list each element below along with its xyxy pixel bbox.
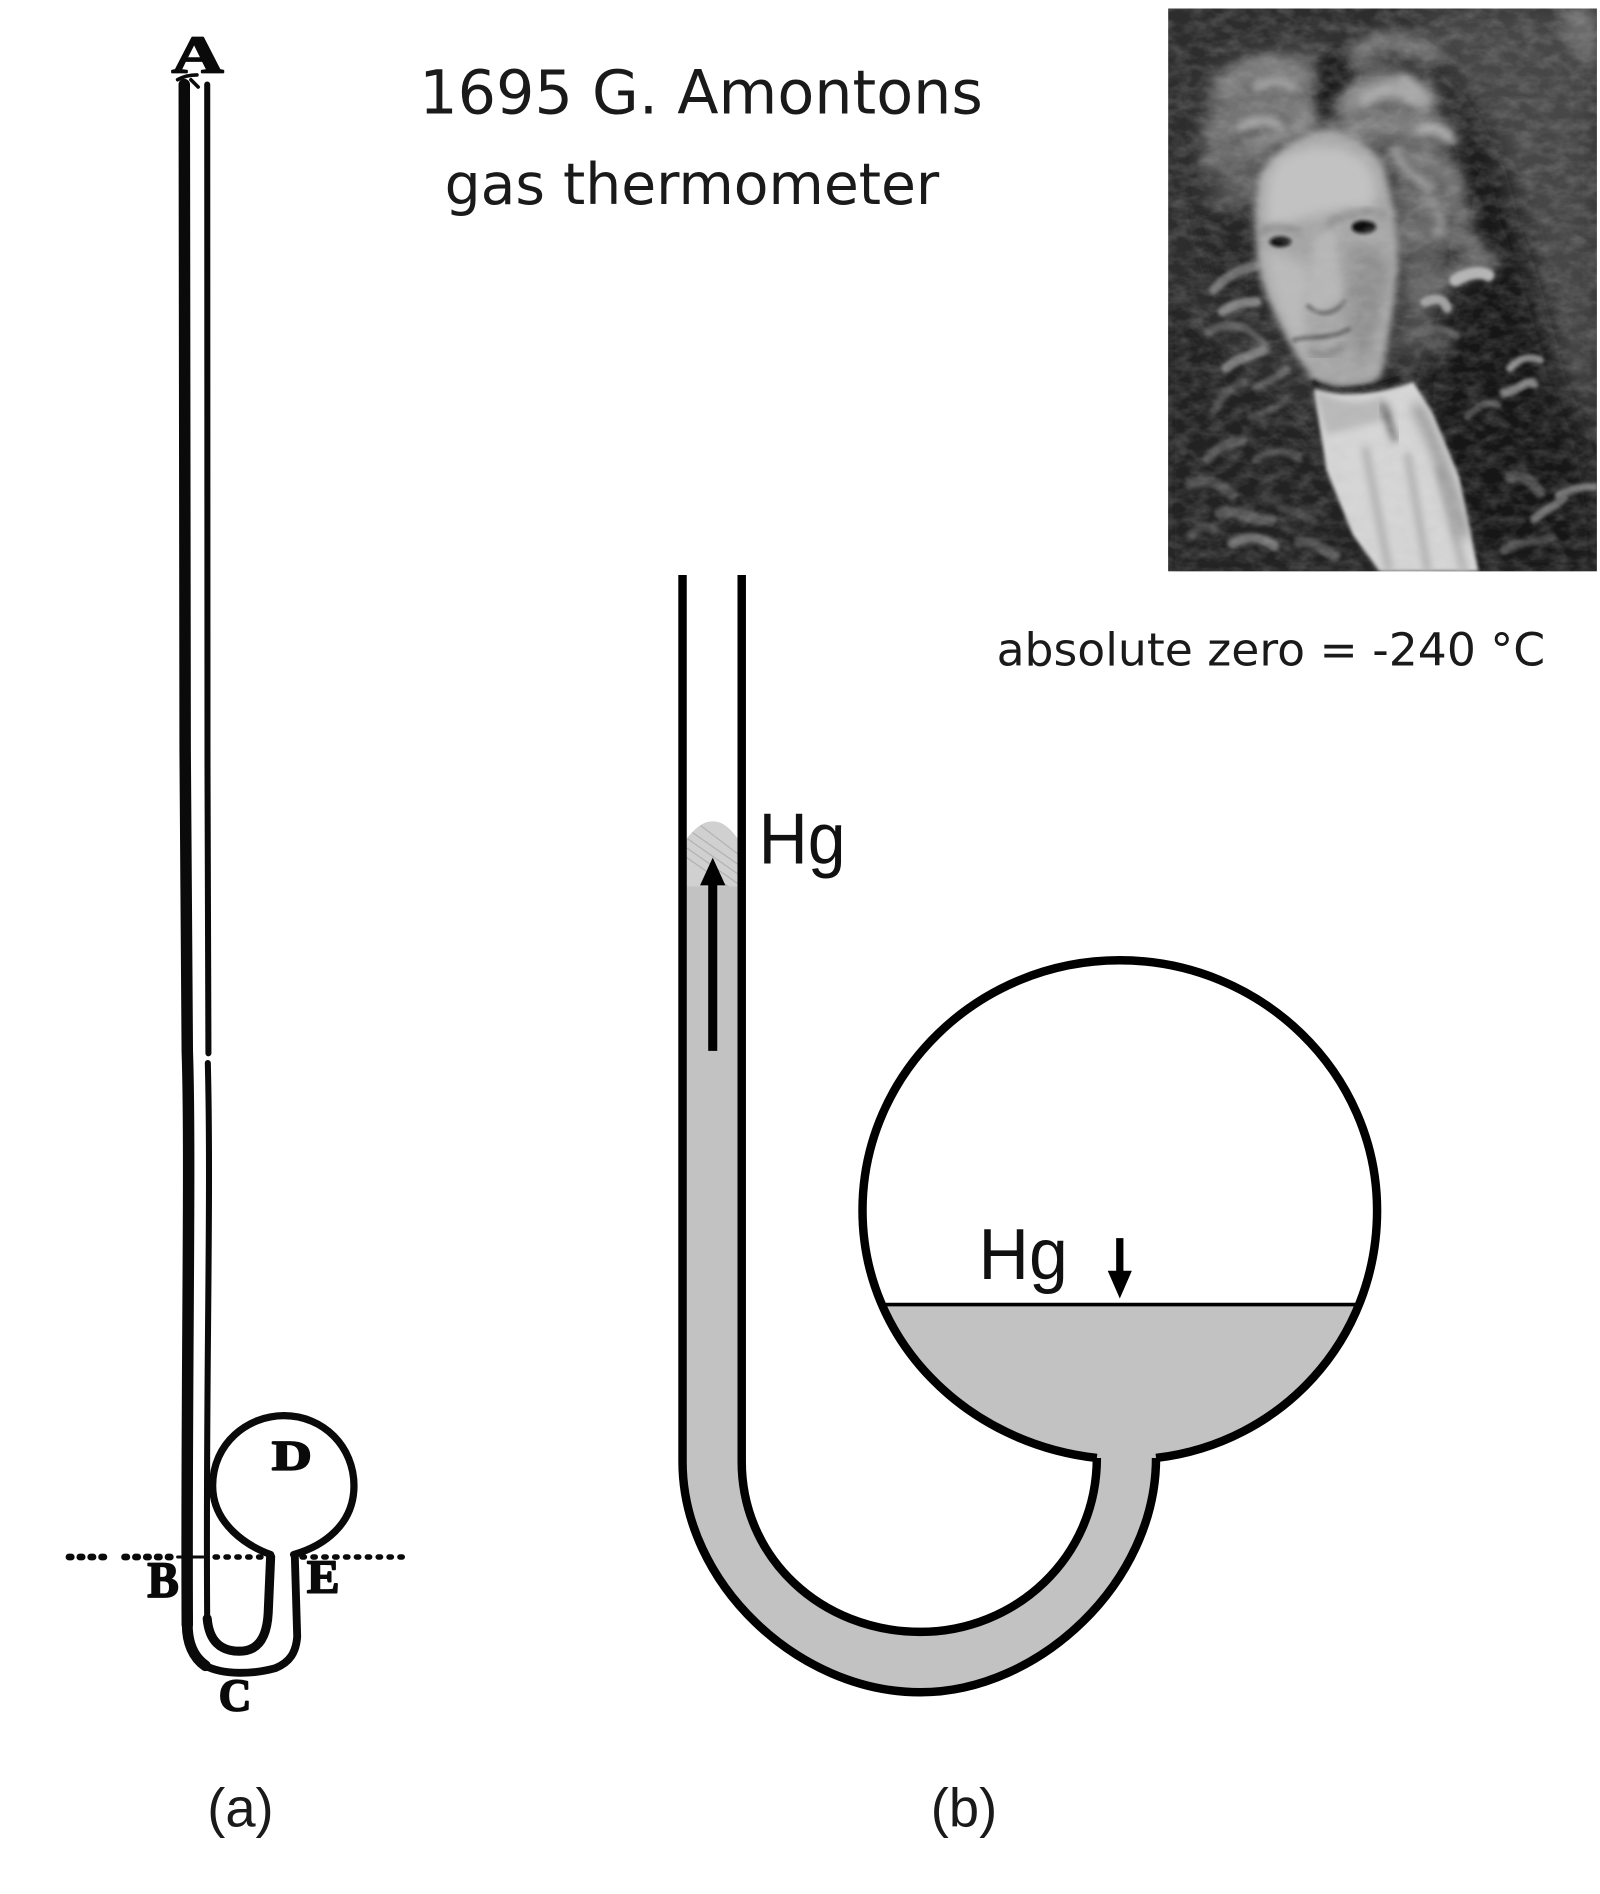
nose shadow [1307,300,1346,313]
arrow up [709,879,716,1051]
eyes [1270,236,1291,247]
dark hair shadows [1416,60,1597,571]
diagram (a): historic woodcut thermometer [69,26,407,1720]
bulb D [213,1416,354,1555]
letter A: A [172,26,224,84]
hair mid-tone mass around the head [1208,51,1454,374]
lower hair curls [1190,266,1595,556]
Hg labels: Hg [759,799,846,880]
mid hair highlights [1242,79,1450,236]
letters B C D E [147,1433,339,1720]
tube [184,85,189,1625]
letters B C D E: C [219,1669,251,1720]
letters B C D E: E [307,1552,339,1604]
tube outline [683,575,1156,1692]
mouth [1293,329,1351,341]
title [419,59,983,218]
upper hair curls [1208,41,1492,344]
letters B C D E: B [147,1552,179,1608]
glass bulb [863,960,1377,1458]
title: 1695 G. Amontons [419,59,983,129]
letters B C D E: D [272,1433,312,1480]
U-bend [187,1625,205,1666]
portrait of G. Amontons [1168,8,1597,571]
mercury in bulb [882,1305,1359,1459]
label (a): (a) [207,1777,274,1838]
canvas noise [1168,8,1597,571]
jaw shadow [1312,377,1401,390]
label (b): (b) [931,1777,997,1838]
arrow down [1117,1238,1123,1274]
caption: absolute zero: absolute zero = -240 °C [997,624,1545,677]
cravat [1314,382,1479,571]
dotted line [69,1554,178,1560]
face [1255,129,1401,390]
Hg labels: Hg [978,1214,1068,1295]
mercury level [882,1303,1359,1306]
mercury in tube [686,821,1156,1693]
title: gas thermometer [445,152,940,218]
mercury meniscus [687,822,738,886]
diagram (b): mercury U-tube [676,575,1377,1693]
Hg labels [759,799,1068,1295]
